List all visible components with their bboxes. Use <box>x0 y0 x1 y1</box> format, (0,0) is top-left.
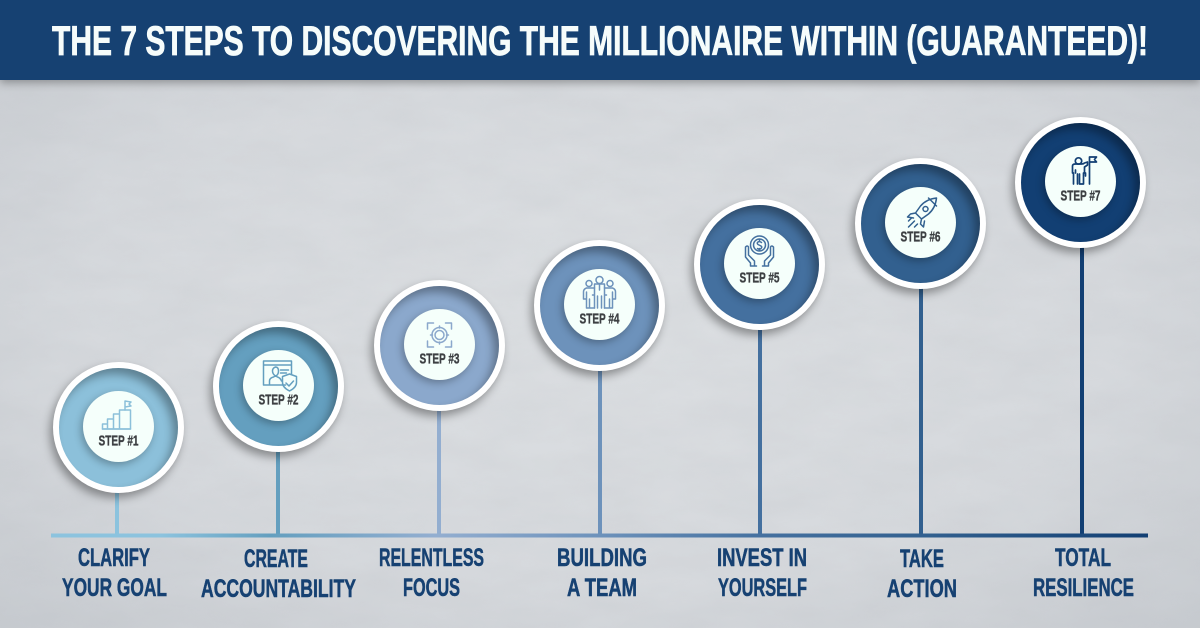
label: step 1: STEP #1 <box>98 434 138 450</box>
label: building a team <box>557 544 647 602</box>
label: create accountability: ACCOUNTABILITY <box>201 575 356 603</box>
label: take action <box>887 545 957 603</box>
label: clarify your goal <box>62 544 167 602</box>
label: create accountability <box>201 545 356 603</box>
label: total resilience: RESILIENCE <box>1033 574 1134 602</box>
step 1 circle <box>53 362 184 493</box>
icon: rising bars with flag <box>102 401 131 429</box>
step 4 circle <box>534 240 665 371</box>
label: take action: ACTION <box>887 575 957 603</box>
label: step 4: STEP #4 <box>580 312 620 328</box>
label: step 5: STEP #5 <box>740 270 780 286</box>
label: step 6: STEP #6 <box>900 230 940 246</box>
icon: focus target <box>428 323 452 347</box>
label: invest in yourself: YOURSELF <box>718 574 807 602</box>
step 2 circle <box>213 321 344 452</box>
header banner with title <box>0 0 1200 80</box>
label: step 7: STEP #7 <box>1060 188 1100 204</box>
icon: team of three people <box>584 276 616 308</box>
label: invest in yourself: INVEST IN <box>717 544 807 572</box>
step 5 circle <box>694 199 825 330</box>
label: total resilience <box>1033 544 1134 602</box>
label: relentless focus <box>379 544 484 602</box>
icon: rocket <box>908 198 936 227</box>
label: clarify your goal: CLARIFY <box>78 544 150 572</box>
label: invest in yourself <box>717 544 807 602</box>
label: step 2: STEP #2 <box>258 392 298 408</box>
icon: profile window with shield <box>264 361 296 391</box>
label: relentless focus: RELENTLESS <box>379 544 484 572</box>
label: total resilience: TOTAL <box>1055 544 1111 572</box>
label: building a team: BUILDING <box>557 544 647 572</box>
label: create accountability: CREATE <box>244 545 308 573</box>
label: relentless focus: FOCUS <box>403 574 460 602</box>
step 7 circle <box>1015 117 1146 248</box>
icon: hands holding a coin <box>746 236 774 266</box>
step 3 circle <box>374 280 505 411</box>
icon: person raising a flag <box>1072 157 1096 184</box>
label: take action: TAKE <box>900 545 944 573</box>
step 6 circle <box>855 158 986 289</box>
label: step 3: STEP #3 <box>420 352 460 368</box>
label: building a team: A TEAM <box>567 574 637 602</box>
label: clarify your goal: YOUR GOAL <box>62 574 167 602</box>
